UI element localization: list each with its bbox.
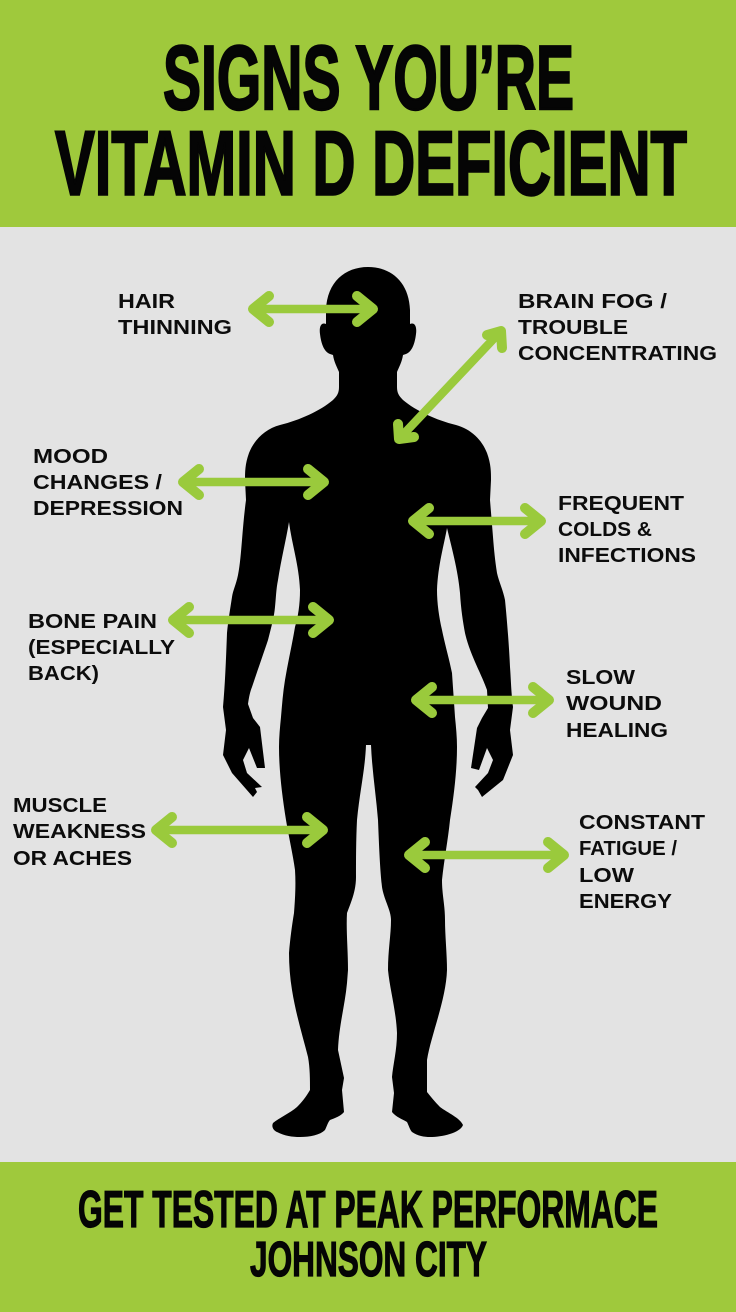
label: mood changes: MOOD <box>33 445 108 468</box>
label: bone pain <box>28 610 175 685</box>
arrow: brain fog <box>398 331 502 439</box>
label: constant fatigue <box>579 811 706 913</box>
label: hair thinning: HAIR <box>118 290 175 313</box>
arrow: mood changes <box>183 469 324 495</box>
arrow: bone pain <box>173 607 329 633</box>
label: bone pain: (ESPECIALLY <box>28 636 175 659</box>
label: muscle weakness <box>13 794 146 870</box>
label: muscle weakness: MUSCLE <box>13 794 107 817</box>
label: muscle weakness: WEAKNESS <box>13 820 146 843</box>
label: bone pain: BONE PAIN <box>28 610 157 633</box>
label: slow wound healing: HEALING <box>566 719 668 742</box>
call to action <box>78 1181 658 1287</box>
arrow: frequent colds <box>413 508 541 534</box>
header band <box>0 0 736 227</box>
arrow: slow wound healing <box>416 687 549 713</box>
label: brain fog: BRAIN FOG / <box>518 290 667 313</box>
label: brain fog: TROUBLE <box>518 316 628 339</box>
label: constant fatigue: CONSTANT <box>579 811 706 834</box>
label: brain fog: CONCENTRATING <box>518 342 717 365</box>
label: brain fog <box>518 290 717 365</box>
label: bone pain: BACK) <box>28 662 99 685</box>
label: frequent colds: COLDS & <box>558 518 652 541</box>
human body silhouette <box>223 267 513 1137</box>
label: mood changes <box>33 445 183 520</box>
footer band <box>0 1162 736 1312</box>
title <box>55 28 687 214</box>
arrow: muscle weakness <box>156 817 323 843</box>
label: frequent colds: INFECTIONS <box>558 544 696 567</box>
arrow: hair thinning <box>253 296 373 322</box>
label: slow wound healing <box>566 666 668 742</box>
label: muscle weakness: OR ACHES <box>13 847 132 870</box>
label: constant fatigue: FATIGUE / <box>579 837 677 860</box>
arrow: constant fatigue <box>409 842 564 868</box>
label: slow wound healing: SLOW <box>566 666 636 689</box>
label: mood changes: DEPRESSION <box>33 497 183 520</box>
call to action: JOHNSON CITY <box>250 1233 487 1287</box>
label: slow wound healing: WOUND <box>566 692 662 715</box>
label: frequent colds <box>558 492 696 567</box>
label: hair thinning <box>118 290 232 339</box>
label: mood changes: CHANGES / <box>33 471 162 494</box>
label: constant fatigue: ENERGY <box>579 890 672 913</box>
label: frequent colds: FREQUENT <box>558 492 685 515</box>
label: hair thinning: THINNING <box>118 316 232 339</box>
label: constant fatigue: LOW <box>579 864 635 887</box>
